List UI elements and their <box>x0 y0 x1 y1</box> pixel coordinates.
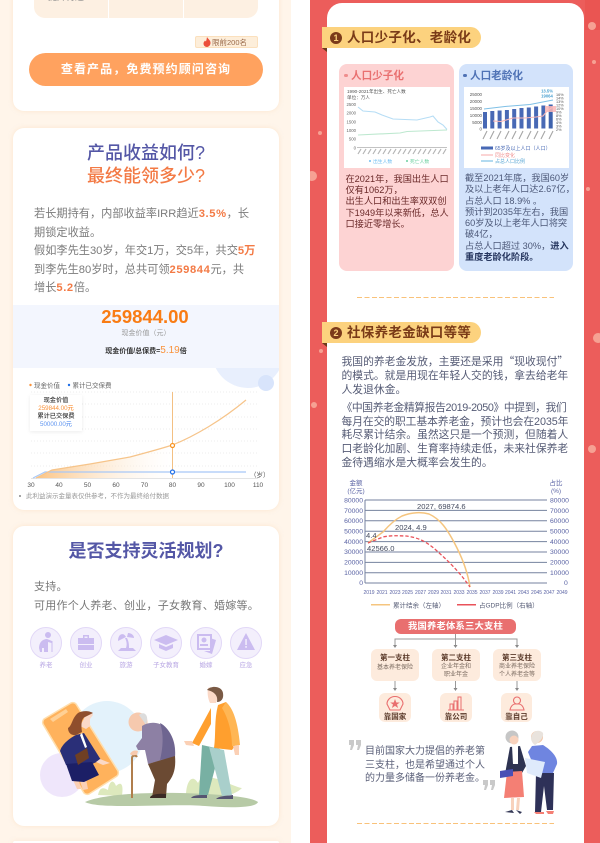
chart: births and deaths: 1000 <box>346 128 357 133</box>
orange value curve <box>36 400 246 478</box>
tooltip: values at age 80: 259844.00元 <box>38 405 74 412</box>
chart: births and deaths: 单位：万人 <box>347 94 370 101</box>
icon labels: 婚嫁 <box>200 660 213 669</box>
text: low birth rate: 仅有1062万， <box>346 185 403 195</box>
heading: section 1 <box>322 27 481 48</box>
label: cash value unit: 现金价值（元） <box>122 330 170 337</box>
panel: low birth rate <box>339 64 454 271</box>
chart: pension balance: 2047 <box>543 590 555 596</box>
chart: aged population: 16% <box>556 93 564 97</box>
text: quote: 的力量多储备一份养老金。 <box>365 773 485 784</box>
stat: cash value: 259844.00 <box>101 306 189 327</box>
box: rely on state <box>379 693 411 722</box>
text: aging population: 重度老龄化阶段。 <box>465 252 538 262</box>
chart: aged population: 3% <box>556 124 562 128</box>
phone with adviser <box>43 703 118 794</box>
ribbon fold 2 <box>322 343 327 347</box>
icon: briefcase <box>78 635 94 650</box>
tag: top 200 <box>195 36 258 48</box>
box: second pillar: 企业年金和 <box>441 664 471 670</box>
decoration: blue circles <box>216 368 279 391</box>
chart: pension balance: 70000 <box>344 508 363 515</box>
chart: cash value curve <box>27 380 270 489</box>
icon labels: 养老 <box>40 660 53 669</box>
text: actuarial report paragraph: 耗尽累计结余。虽然这只是一个预测，但随着人 <box>342 429 568 441</box>
chart: pension balance: 2027 <box>415 590 426 596</box>
panel: white article card <box>327 3 584 843</box>
chart: pension balance: 2031 <box>440 590 452 596</box>
chart: births and deaths: 1500 <box>346 120 357 124</box>
icon: elderly <box>39 632 52 652</box>
badge: number 2 <box>330 327 342 339</box>
chart: pension balance: 30000 <box>550 549 569 556</box>
tag: top 200: 限前200名 <box>212 38 247 47</box>
chart: pension balance: 2024, 4.9 <box>395 523 427 532</box>
text: aging population: 破4亿， <box>465 229 498 239</box>
icon: certificates <box>197 634 216 654</box>
elderly man with cane <box>128 712 175 798</box>
illustration: family with phone and elder <box>40 686 258 808</box>
divider 2 <box>357 822 554 824</box>
chart: aged population: 0 <box>480 126 483 132</box>
heading: product returns: 产品收益如何? <box>87 142 205 162</box>
chart: pension balance: 0 <box>359 580 363 587</box>
button: book consultation: 查看产品，免费预约顾问咨询 <box>61 62 231 76</box>
box: third pillar: 第三支柱 <box>502 653 532 662</box>
x axis labels: 30 <box>27 482 35 489</box>
text: low birth rate: 下1949年以来新低，总人 <box>346 208 449 218</box>
illustration: elderly couple <box>500 730 558 814</box>
box: second pillar <box>432 649 480 681</box>
woman <box>500 730 526 814</box>
chart: aged population <box>464 87 569 168</box>
box: first pillar <box>371 649 419 681</box>
x axis labels: 50 <box>84 482 91 489</box>
chart: pension balance: 金额 <box>350 478 363 487</box>
panel: product returns card <box>13 128 279 510</box>
text: returns explanation: 期锁定收益。 <box>34 226 101 238</box>
badge: number 2: 2 <box>333 328 338 338</box>
text: low birth rate: 出生人口和出生率双双创 <box>346 196 447 206</box>
chart: aged population: 13.5% <box>541 88 553 94</box>
banner: three pillars <box>395 619 516 634</box>
text: aging population: 预计到2035年左右，我国 <box>465 207 568 217</box>
chart: aged population: 25000 <box>470 92 483 97</box>
icon: mortarboard <box>154 635 178 651</box>
text: pay-as-you-go paragraph <box>342 352 568 396</box>
text: aging population: 截至2021年底，我国60岁 <box>465 173 569 183</box>
box: first pillar: 基本养老保险 <box>377 665 413 671</box>
chart: aged population: 20000 <box>470 99 483 104</box>
x axis labels: 90 <box>197 482 205 489</box>
chart: pension balance: 50000 <box>550 528 569 536</box>
chart: pension balance: (亿元) <box>347 486 365 495</box>
text: pay-as-you-go paragraph: 我国的养老金发放，主要还是采用“现收现付” <box>342 352 568 368</box>
icon labels: 应急 <box>240 660 253 669</box>
chart: pension balance: 40000 <box>344 539 363 546</box>
chart: aged population: 5000 <box>472 120 483 125</box>
chart: aged population: 65岁及以上人口（人口） <box>495 145 551 152</box>
button: book consultation <box>29 53 263 86</box>
icon: opening quote <box>349 740 361 750</box>
chart: aged population: 9% <box>556 110 562 114</box>
chart: aged population: 12% <box>556 104 564 108</box>
icon labels: 旅游 <box>120 660 133 669</box>
text: actuarial report paragraph: 口老龄化加剧、生育率持续走低，未来社保养老 <box>342 443 568 455</box>
chart: aged population: 占总人口比例 <box>495 158 525 165</box>
chart: aged population: 13% <box>556 100 564 104</box>
box: rely on company <box>440 693 472 722</box>
text: returns explanation: 增长5.2倍。 <box>34 282 96 294</box>
chart: pension balance: 占比 <box>550 478 563 487</box>
icon: palm tree <box>118 633 136 651</box>
chart: pension balance: 2025 <box>402 590 413 596</box>
chart: pension balance: 50000 <box>344 528 363 536</box>
chart: aged population: 15000 <box>470 106 483 111</box>
icon row: uses <box>30 627 262 669</box>
background circles <box>40 701 143 797</box>
icon: warning <box>237 633 255 650</box>
plants and ground <box>85 775 258 807</box>
decoration: snow dots <box>310 0 600 453</box>
icon: flame <box>204 37 210 47</box>
tooltip: values at age 80: 50000.00元 <box>40 421 72 428</box>
chart: pension balance: 4.4 <box>366 531 377 540</box>
text: quote: 目前国家大力提倡的养老第 <box>365 746 485 757</box>
chart: births and deaths: 2500 <box>346 102 357 107</box>
box: second pillar: 第二支柱 <box>441 653 471 662</box>
tooltip: values at age 80: 累计已交保费 <box>37 413 75 420</box>
chart: pension balance: 60000 <box>344 518 363 525</box>
text: actuarial report paragraph: 金待遇缩水是大概率会发生的。 <box>342 457 493 469</box>
heading: aging population: 人口老龄化 <box>470 70 523 82</box>
stat: multiple of premiums: 现金价值/总保费=5.19倍 <box>105 345 187 356</box>
x axis labels: 70 <box>141 482 148 489</box>
chart: pension balance: 2029 <box>428 590 439 596</box>
badge: number 1: 1 <box>333 33 338 43</box>
chart: pension balance: 2037 <box>479 590 491 596</box>
panel: flexible planning card <box>13 526 279 826</box>
chart: births and deaths: 0 <box>354 146 357 150</box>
chart: pension balance: 20000 <box>344 560 363 566</box>
box: second pillar: 职业年金 <box>444 672 468 678</box>
chart: pension balance <box>344 478 569 610</box>
x axis labels: 100 <box>224 482 235 489</box>
text: flexible planning body <box>34 580 259 612</box>
badge: number 1 <box>330 32 342 44</box>
chart: pension balance: 20000 <box>550 560 569 566</box>
chart legend: 现金价值 <box>34 380 60 390</box>
chart: pension balance: (%) <box>551 488 561 495</box>
panel: top product card <box>13 0 279 111</box>
heading: low birth rate: 人口少子化 <box>351 70 404 82</box>
icon labels: 子女教育 <box>153 660 180 669</box>
heading: section 1: 人口少子化、老龄化 <box>347 30 471 45</box>
text: aging population: 占总人口超过 30%，进入 <box>465 241 569 251</box>
area under curve <box>36 445 172 478</box>
x axis labels: 60 <box>112 482 120 489</box>
divider 1 <box>357 296 554 298</box>
text: pay-as-you-go paragraph: 的模式。就是用现在年轻人交的钱，拿去给老年 <box>342 370 568 382</box>
chart legend <box>29 380 112 390</box>
chart: pension balance: 占GDP比例（右轴） <box>479 600 539 610</box>
chart: pension balance: 2035 <box>466 590 478 596</box>
text: flexible planning body: 支持。 <box>34 581 68 593</box>
heading: product returns <box>87 142 205 186</box>
text: aging population <box>465 173 575 262</box>
chart: cash value curve: （岁） <box>250 470 270 479</box>
text: low birth rate: 在2021年，我国出生人口 <box>346 174 449 184</box>
text: low birth rate <box>346 174 449 229</box>
chart: pension balance: 80000 <box>550 498 569 504</box>
chart: pension balance: 2045 <box>531 590 542 596</box>
ribbon fold 1 <box>322 48 327 52</box>
man with document <box>525 731 557 814</box>
chart: pension balance: 80000 <box>344 498 363 504</box>
tooltip: values at age 80 <box>30 395 82 431</box>
text: aging population: 60岁及以上老年人口将突 <box>465 218 567 228</box>
text: quote <box>365 745 485 784</box>
x axis labels <box>27 482 264 489</box>
x axis labels: 80 <box>169 482 176 489</box>
text: actuarial report paragraph <box>342 402 568 469</box>
box: third pillar: 商业养老保险 <box>499 664 535 670</box>
chart: pension balance: 60000 <box>550 518 569 525</box>
connector arrows <box>393 634 519 691</box>
chart: births and deaths <box>344 87 450 168</box>
text: returns explanation <box>34 207 255 294</box>
heading: flexible planning: 是否支持灵活规划? <box>68 541 224 561</box>
chart: births and deaths: 1990-2021年出生、死亡人数 <box>347 88 406 95</box>
chart: pension balance: 2039 <box>492 590 504 596</box>
panel: cash value summary <box>13 305 279 368</box>
chart: pension balance: 2021 <box>376 590 388 596</box>
left page background <box>0 0 291 843</box>
chart: pension balance: 2033 <box>453 590 465 596</box>
chart: pension balance: 2019 <box>363 590 375 596</box>
panel: red backdrop <box>310 0 600 843</box>
icon: closing quote <box>483 780 495 790</box>
text: flexible planning body: 可用作个人养老、创业，子女教育、婚嫁等。 <box>34 600 259 612</box>
chart: pension balance: 2023 <box>389 590 401 596</box>
chart: pension balance: 10000 <box>550 570 569 577</box>
chart: aged population: 8% <box>556 114 562 118</box>
text: returns explanation: 假如李先生30岁，年交1万，交5年，共交5万 <box>34 245 255 257</box>
text: actuarial report paragraph: 《中国养老金精算报告2019-2050》中提到，我们 <box>342 402 566 414</box>
box: third pillar: 个人养老金等 <box>499 672 535 678</box>
box: rely on self <box>501 693 532 722</box>
chart: aged population: 19064 <box>541 94 553 98</box>
text: returns explanation: 若长期持有，内部收益率IRR趋近3.5%，长 <box>34 208 249 220</box>
box: rely on state: 靠国家 <box>384 712 406 721</box>
chart: pension balance: 2041 <box>505 590 516 596</box>
chart: pension balance: 0 <box>564 580 568 587</box>
box: third pillar <box>493 649 541 681</box>
chart: births and deaths: 500 <box>349 136 357 142</box>
chart: births and deaths: 死亡人数 <box>410 158 429 165</box>
chart: pension balance: 2049 <box>556 590 568 596</box>
box: first pillar: 第一支柱 <box>380 653 410 662</box>
x axis labels: 110 <box>253 482 264 489</box>
blue premiums line <box>33 472 246 478</box>
panel: next card peek <box>13 841 279 843</box>
chart: pension balance: 2043 <box>518 590 529 596</box>
banner: three pillars: 我国养老体系三大支柱 <box>408 621 503 631</box>
chart: pension balance: 累计结余（左轴） <box>393 600 445 610</box>
note: disclaimer: 此利益演示金量表仅供参考，不作为最终给付数据 <box>26 493 169 500</box>
heading: section 2 <box>322 322 481 343</box>
younger man in orange jacket <box>184 687 240 799</box>
chart: aged population: 同比变化 <box>495 152 515 159</box>
chart: pension balance: 30000 <box>344 549 363 556</box>
chart legend: 累计已交保费 <box>72 380 112 390</box>
text: quote: 三支柱，也是希望通过个人 <box>365 760 485 771</box>
text: aging population: 占总人口 18.9% 。 <box>465 196 542 206</box>
heading: section 2: 社保养老金缺口等等 <box>347 325 471 340</box>
chart: aged population: 10% <box>556 107 564 111</box>
chart: pension balance: 10000 <box>344 570 363 577</box>
box: rely on company: 靠公司 <box>445 712 467 721</box>
text: pay-as-you-go paragraph: 人发退休金。 <box>342 384 406 396</box>
heading: product returns: 最终能领多少? <box>87 166 205 186</box>
chart: aged population: 10000 <box>470 113 483 118</box>
icon labels <box>40 660 253 669</box>
chart: aged population: 2% <box>556 128 562 132</box>
tooltip: values at age 80: 现金价值 <box>44 397 68 404</box>
text: low birth rate: 口接近零增长。 <box>346 219 410 229</box>
text: actuarial report paragraph: 每月在交的职工基本养老金，预计也会在2035年 <box>342 416 568 428</box>
panel: aging population <box>459 64 573 271</box>
chart: pension balance: 42566.0 <box>367 544 394 553</box>
chart: aged population: 4% <box>556 121 562 125</box>
icon labels: 创业 <box>80 660 93 669</box>
chart: births and deaths: 2000 <box>346 110 357 116</box>
chart: aged population: 14% <box>556 96 564 100</box>
benefit table remnant <box>34 0 258 18</box>
text: aging population: 及以上老年人口达2.67亿， <box>465 184 575 194</box>
chart: births and deaths: 出生人数 <box>373 158 392 165</box>
chart: pension balance: 40000 <box>550 539 569 546</box>
chart: aged population: 6% <box>556 118 562 122</box>
x axis labels: 40 <box>55 482 63 489</box>
box: rely on self: 靠自己 <box>505 712 528 721</box>
text: returns explanation: 到李先生80岁时，总共可领259844元，共 <box>34 264 244 276</box>
chart: pension balance: 2027, 69874.6 <box>417 502 466 511</box>
rotated year ticks <box>358 149 446 154</box>
chart: pension balance: 70000 <box>550 508 569 515</box>
